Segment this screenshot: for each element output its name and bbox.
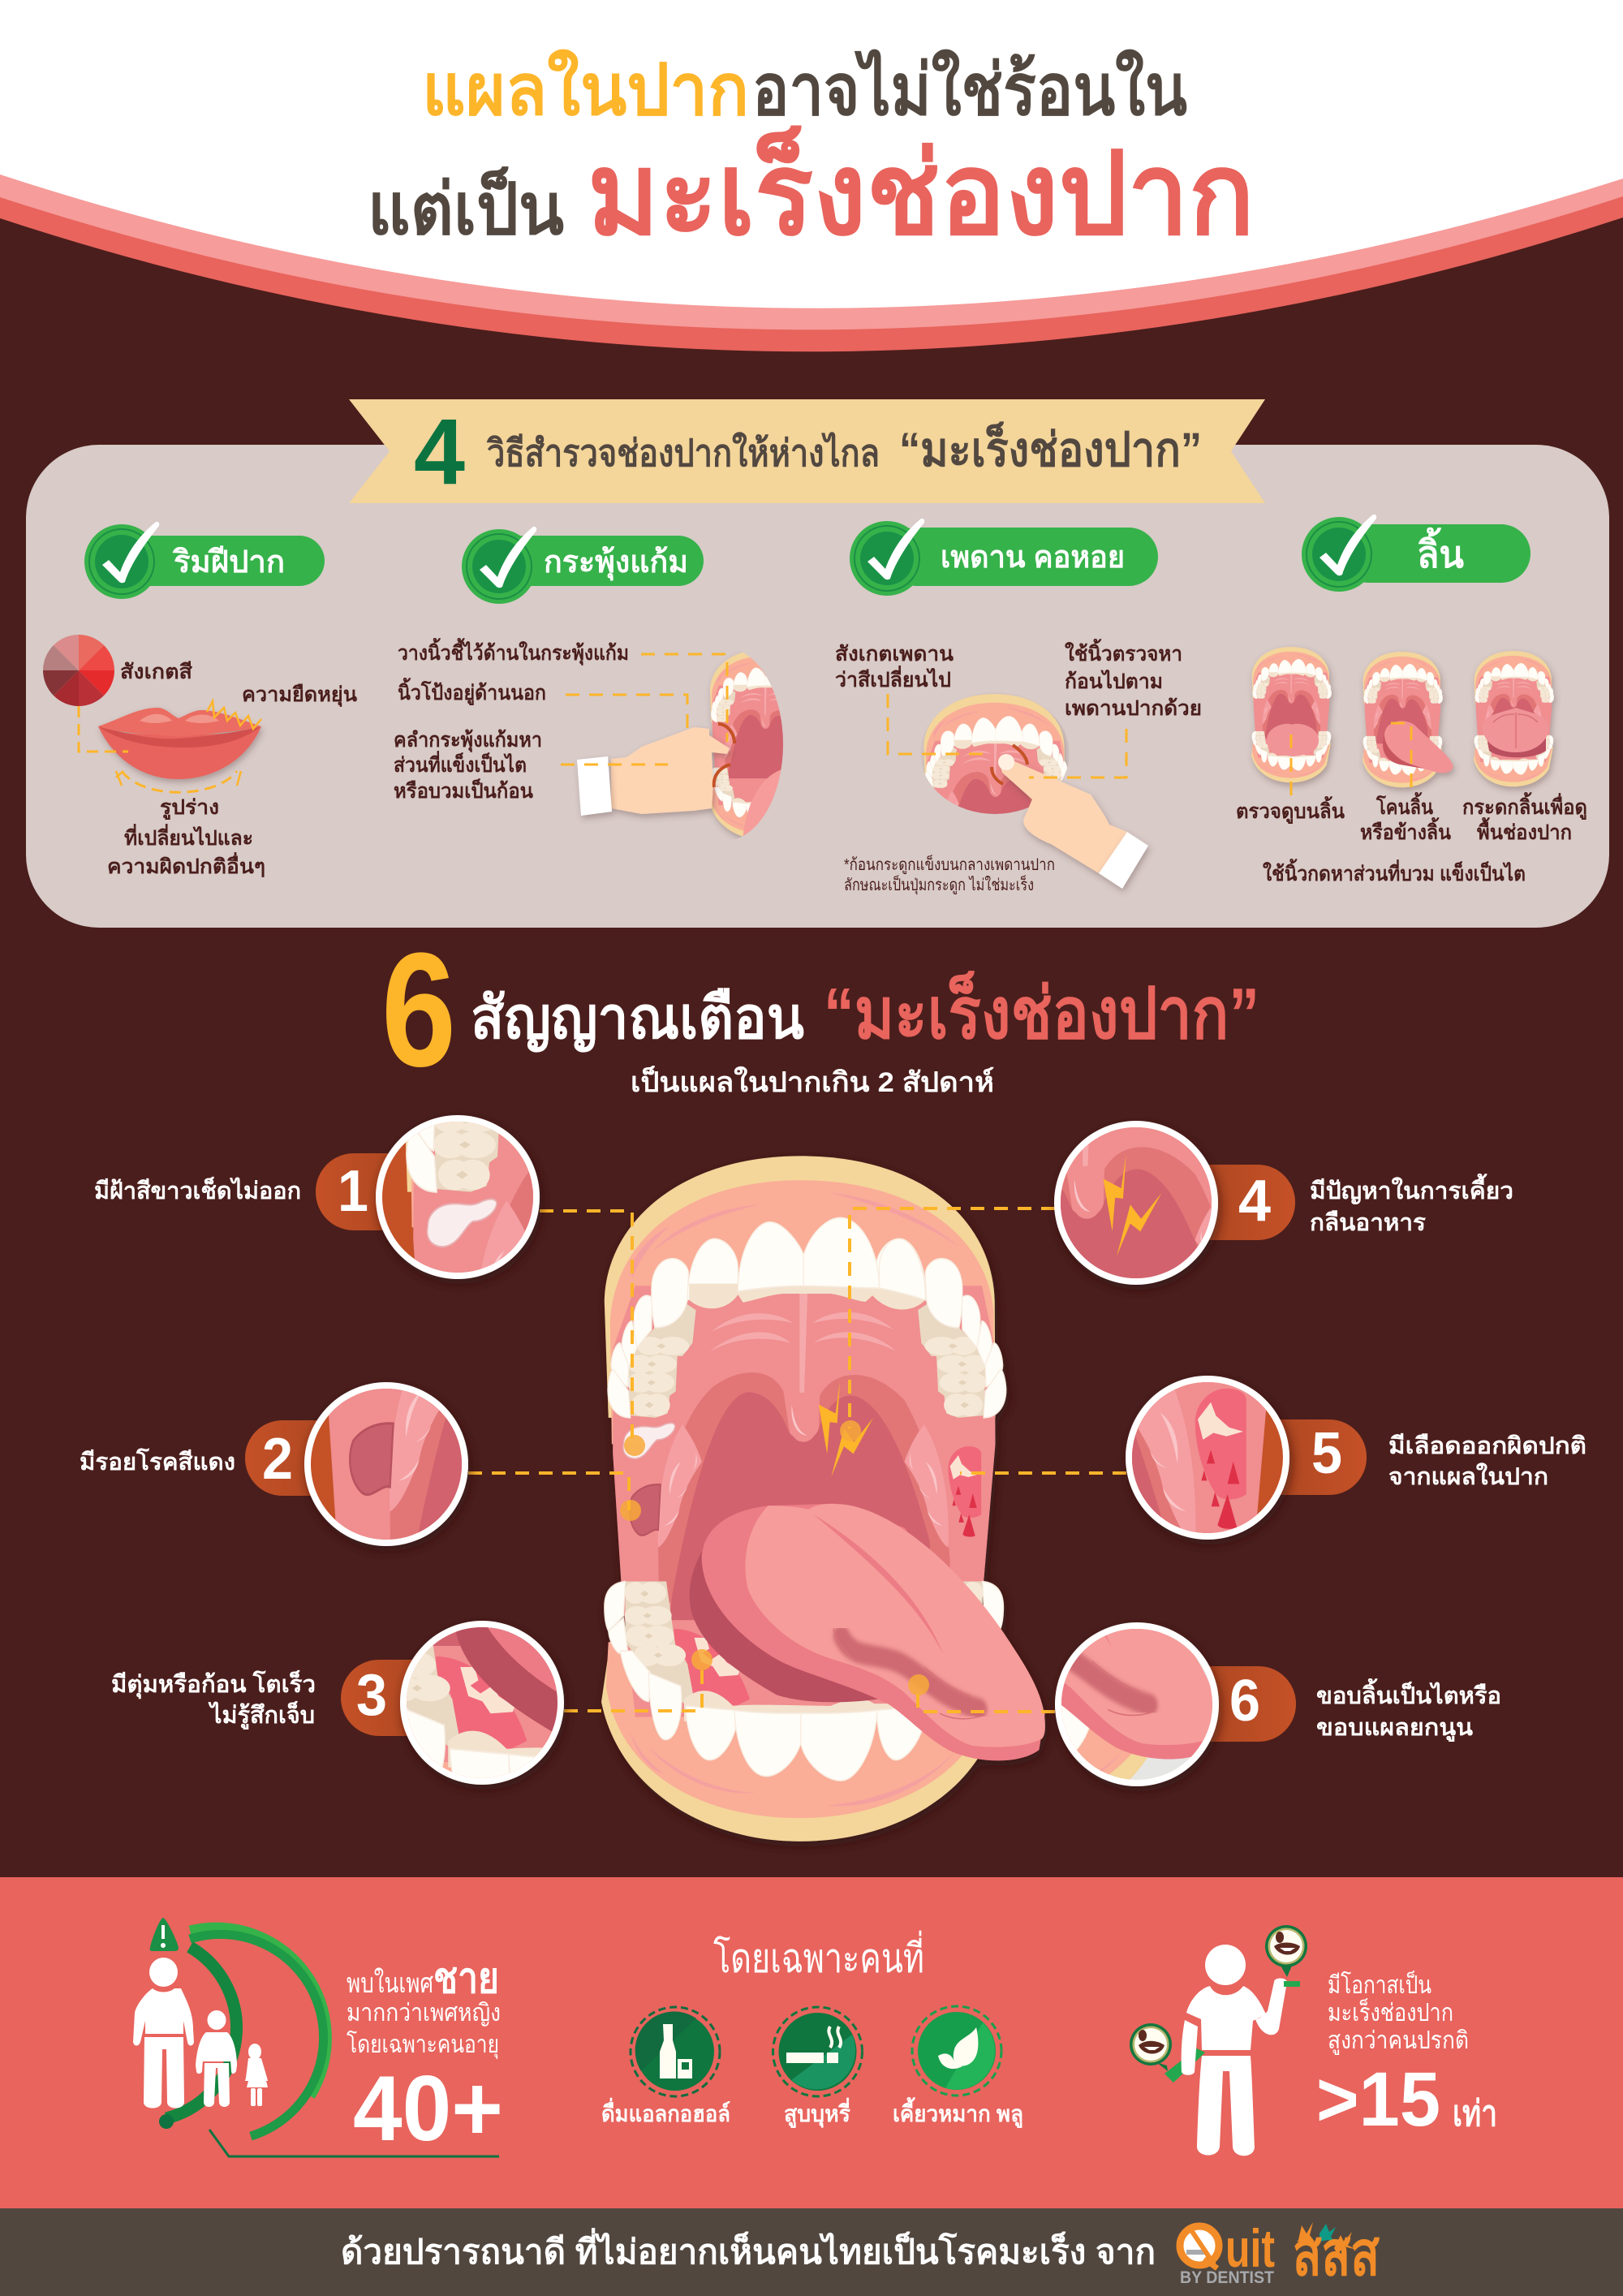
text: palate notes: *ก้อนกระดูกแข็งบนกลางเพดานปาก: [844, 854, 1055, 875]
text: 15 times risk: มะเร็งช่องปาก: [1328, 1997, 1453, 2027]
cheek exam illustration: [561, 653, 783, 839]
sign 6: ขอบแผลยกนูน: [1316, 1715, 1473, 1742]
text: 15 times risk: มีโอกาสเป็น: [1328, 1970, 1431, 1999]
palate exam illustration: [886, 693, 1152, 894]
dashed guides: tongue: [1291, 723, 1411, 798]
sign 4: มีปัญหาในการเคี้ยว: [1310, 1173, 1513, 1205]
badge: palate: [850, 519, 1158, 596]
title: แผลในปาก: [422, 49, 749, 130]
sign 5: มีเลือดออกผิดปกติ: [1388, 1433, 1586, 1459]
heading: six warning signs: [381, 920, 1259, 1101]
sign 2: 2: [262, 1427, 293, 1492]
text: lips notes: ความผิดปกติอื่นๆ: [107, 852, 265, 878]
text: tongue notes: [1236, 791, 1587, 885]
icon: person with markers: [1130, 1925, 1307, 2156]
header curve: [0, 0, 1623, 351]
labels: risk factors: [601, 2096, 1023, 2128]
text: palate notes: ใช้นิ้วตรวจหา: [1065, 638, 1182, 666]
icon: warning triangle: [150, 1918, 179, 1951]
banner: section heading: วิธีสำรวจช่องปากให้ห่างไกล: [486, 431, 880, 474]
text: 15 times risk: [1316, 1970, 1497, 2143]
text: palate notes: [835, 638, 1202, 895]
icon: cigarette: [773, 2007, 862, 2096]
sign 2: [80, 963, 932, 1923]
logo: ThaiHealth: สสส: [1293, 2220, 1380, 2289]
sign 5: 5: [1311, 1421, 1342, 1486]
badge: cheek: [462, 527, 704, 604]
text: lips notes: [107, 661, 357, 878]
badge: lips: ริมฝีปาก: [172, 545, 285, 579]
dashed guides: lips: [79, 701, 261, 792]
text: tongue notes: โคนลิ้น: [1375, 791, 1433, 819]
dashed connector lines: [468, 1208, 1126, 1712]
heading: six warning signs: เป็นแผลในปากเกิน 2 สัปดาห์: [631, 1065, 994, 1098]
cuff: [577, 756, 612, 816]
logo: Quit by Dentist: [1180, 2218, 1275, 2287]
text: palate notes: ว่าสีเปลี่ยนไป: [835, 666, 951, 691]
sign 6: [1048, 1622, 1500, 1793]
text: male over 40: โดยเฉพาะคนอายุ: [347, 2030, 499, 2060]
small mouth: top of tongue: [1251, 647, 1332, 782]
sign 4: [1048, 1121, 1513, 1291]
banner: section heading: 4: [414, 400, 465, 504]
banner: section heading: “มะเร็งช่องปาก”: [899, 421, 1202, 476]
sign 3: 3: [356, 1663, 387, 1728]
chart: green arcs: [159, 1927, 499, 2156]
small mouth: tongue side: [1363, 652, 1453, 787]
sign 3: มีตุ่มหรือก้อน โตเร็ว: [111, 1669, 316, 1699]
text: cheek notes: ส่วนที่แข็งเป็นไต: [394, 751, 527, 777]
badge: tongue: ลิ้น: [1417, 527, 1465, 575]
heading: especially those who: โดยเฉพาะคนที่: [713, 1931, 924, 1981]
text: male over 40: มากกว่าเพศหญิง: [347, 2000, 501, 2027]
fingertip: [998, 754, 1014, 770]
heading: six warning signs: สัญญาณเตือน: [471, 986, 804, 1053]
text: 15 times risk: สูงกว่าคนปรกติ: [1328, 2027, 1469, 2055]
logo: Quit by Dentist: uit: [1225, 2218, 1275, 2278]
labels: risk factors: สูบบุหรี่: [784, 2097, 850, 2128]
heading: six warning signs: “มะเร็งช่องปาก”: [824, 970, 1259, 1053]
sign 4: 4: [1238, 1169, 1271, 1234]
sign 2: มีรอยโรคสีแดง: [80, 1447, 235, 1475]
sign 3: [111, 1089, 881, 1911]
colour wheel: [43, 635, 114, 706]
icon: alcohol: [631, 2007, 720, 2096]
sign 1: มีฝ้าสีขาวเช็ดไม่ออก: [94, 1176, 301, 1204]
text: tongue notes: พื้นช่องปาก: [1477, 816, 1572, 844]
sign 5: จากแผลในปาก: [1388, 1462, 1548, 1490]
panel: 4 ways to self-check: [26, 399, 1609, 941]
text: male over 40: [347, 1955, 503, 2160]
text: lips notes: ความยืดหยุ่น: [242, 683, 357, 708]
text: lips notes: ที่เปลี่ยนไปและ: [124, 824, 253, 850]
title: แต่เป็น: [368, 166, 564, 249]
panel background: [26, 445, 1609, 928]
text: male over 40: พบในเพศ: [347, 1967, 433, 1999]
sign 4: กลืนอาหาร: [1310, 1210, 1426, 1236]
marker: upper: [1265, 1925, 1307, 1977]
text: lips notes: สังเกตสี: [120, 661, 193, 683]
cigarette: [1284, 1981, 1300, 1987]
text: cheek notes: นิ้วโป้งอยู่ด้านนอก: [398, 677, 546, 706]
panel: risk groups: [0, 1877, 1623, 2208]
banner: section heading: [349, 399, 1265, 504]
title: มะเร็งช่องปาก: [588, 124, 1255, 259]
text: palate notes: สังเกตเพดาน: [835, 643, 954, 666]
badge: palate: เพดาน คอหอย: [941, 541, 1125, 575]
badge: tongue: [1302, 515, 1530, 592]
sign 6: 6: [1229, 1669, 1260, 1734]
text: palate notes: เพดานปากด้วย: [1065, 697, 1202, 720]
footer: [0, 2208, 1623, 2296]
band background: [0, 1877, 1623, 2208]
hand: [611, 727, 730, 814]
text: cheek notes: วางนิ้วชี้ไว้ด้านในกระพุ้งแก้ม: [398, 637, 629, 666]
text: 15 times risk: >15: [1316, 2057, 1440, 2143]
text: tongue notes: ตรวจดูบนลิ้น: [1236, 795, 1345, 825]
badge: lips: [84, 522, 325, 599]
text: 15 times risk: เท่า: [1453, 2094, 1497, 2134]
text: lips notes: รูปร่าง: [160, 796, 219, 821]
text: cheek notes: คลำกระพุ้งแก้มหา: [394, 729, 542, 753]
text: male over 40: 40+: [353, 2057, 503, 2160]
hand: [1001, 759, 1127, 873]
sign 3: ไม่รู้สึกเจ็บ: [208, 1700, 315, 1730]
text: palate notes: ลักษณะเป็นปุ่มกระดูก ไม่ใช่มะเร็ง: [844, 874, 1034, 895]
small mouth: tongue raised: [1474, 651, 1554, 786]
lips illustration: [98, 708, 261, 779]
sign 1: [94, 842, 992, 1760]
footer text: ด้วยปรารถนาดี ที่ไม่อยากเห็นคนไทยเป็นโรคมะเร็ง จาก: [341, 2228, 1156, 2271]
marker: lower: [1130, 2023, 1172, 2071]
sign 5: [1120, 1376, 1586, 1546]
badge: cheek: กระพุ้งแก้ม: [544, 545, 688, 581]
title: อาจไม่ใช่ร้อนใน: [752, 49, 1187, 130]
text: tongue notes: กระดกลิ้นเพื่อดู: [1462, 791, 1587, 821]
marker dots on mouth: [620, 1420, 929, 1695]
labels: risk factors: เคี้ยวหมาก พลู: [893, 2096, 1023, 2128]
sign 6: ขอบลิ้นเป็นไตหรือ: [1316, 1678, 1501, 1709]
icon: betel leaf: [912, 2006, 1001, 2096]
text: palate notes: ก้อนไปตาม: [1065, 669, 1163, 693]
text: cheek notes: [394, 637, 629, 803]
heading: six warning signs: 6: [381, 920, 456, 1101]
text: tongue notes: ใช้นิ้วกดหาส่วนที่บวม แข็งเป็นไต: [1263, 858, 1526, 885]
labels: risk factors: ดื่มแอลกอฮอล์: [601, 2097, 730, 2126]
sign 1: 1: [338, 1159, 368, 1224]
central open mouth illustration: [601, 1156, 1045, 1842]
text: tongue notes: หรือข้างลิ้น: [1360, 816, 1451, 844]
logo: Quit by Dentist: BY DENTIST: [1180, 2268, 1274, 2287]
title: [368, 49, 1255, 259]
icon: family figures: [133, 1958, 268, 2109]
text: male over 40: ชาย: [433, 1955, 499, 2002]
text: cheek notes: หรือบวมเป็นก้อน: [394, 778, 533, 803]
cuff: [1099, 832, 1148, 889]
